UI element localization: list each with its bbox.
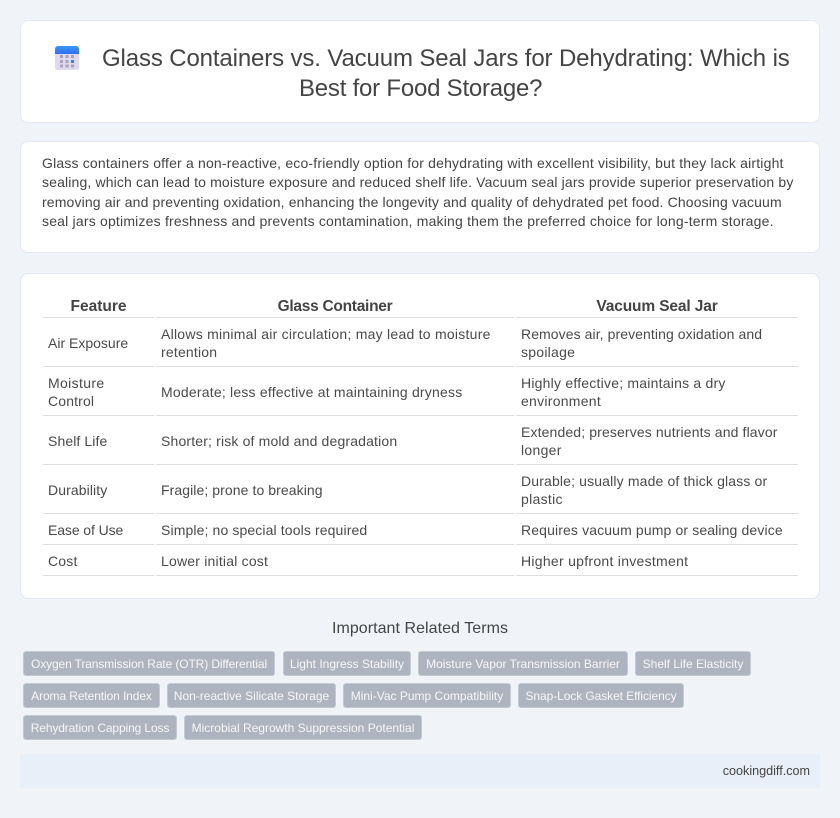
row: moisture control [48,375,726,409]
row: air exposure: spoilage [521,344,575,360]
title: Glass Containers vs. Vacuum Seal Jars for Dehydrating: Which is [102,45,790,72]
row: moisture control: Moderate; less effective at maintaining dryness [161,384,462,400]
row: cost: Lower initial cost [161,553,268,569]
row: air exposure: retention [161,344,217,360]
tag list: Mini-Vac Pump Compatibility [351,689,503,703]
row: cost [48,553,688,569]
row: durability: Durable; usually made of thick glass or [521,473,767,489]
tag list: Oxygen Transmission Rate (OTR) Differential [31,657,267,671]
table header: Vacuum Seal Jar [596,298,718,315]
heading: important related terms: Important Related Terms [332,620,508,637]
tag list: Light Ingress Stability [290,657,404,671]
title: Best for Food Storage? [299,75,542,102]
row: air exposure: Removes air, preventing oxidation and [521,326,762,342]
tag list: Microbial Regrowth Suppression Potential [192,721,414,735]
tag list: Rehydration Capping Loss [31,721,169,735]
row: ease of use [48,522,783,538]
row: shelf life [48,424,778,458]
panel: comparison table [20,273,820,599]
row: moisture control: Moisture [48,375,104,391]
tag list [23,651,751,740]
row: moisture control: Highly effective; maintains a dry [521,375,726,391]
icon: calendar [55,46,79,70]
row: shelf life: Extended; preserves nutrients and flavor [521,424,778,440]
row: moisture control: environment [521,393,601,409]
row: moisture control: Control [48,393,94,409]
table header: Feature [70,298,126,315]
row: air exposure: Air Exposure [48,335,128,351]
title [102,45,790,102]
tag list: Non-reactive Silicate Storage [174,689,329,703]
footer bar [20,754,820,788]
text block: intro: seal jars optimizes freshness and prevents contamination, making them the preferred choice for long-term storage. [42,213,774,229]
text block: intro: sealing, which can lead to moisture exposure and reduced shelf life. Vacuum seal jars provide superior preservation by [42,174,793,190]
row: ease of use: Simple; no special tools required [161,522,367,538]
tag list: Moisture Vapor Transmission Barrier [426,657,620,671]
panel: title card [20,20,820,123]
row: shelf life: Shorter; risk of mold and degradation [161,433,397,449]
row: durability: Durability [48,482,107,498]
row: cost: Higher upfront investment [521,553,688,569]
row: ease of use: Ease of Use [48,522,123,538]
row: durability [48,473,767,507]
row: ease of use: Requires vacuum pump or sealing device [521,522,783,538]
panel: intro paragraph [20,141,820,253]
text block: intro: Glass containers offer a non-reactive, eco-friendly option for dehydrating with excellent visibility, but they lack airtight [42,155,784,171]
text block: intro: removing air and preventing oxidation, enhancing the longevity and quality of dehydrated pet food. Choosing vacuum [42,194,782,210]
row: durability: plastic [521,491,563,507]
row: air exposure [48,326,762,360]
row: cost: Cost [48,553,78,569]
tag list: Snap-Lock Gasket Efficiency [525,689,677,703]
row: air exposure: Allows minimal air circulation; may lead to moisture [161,326,491,342]
text block: intro [42,155,794,229]
row: durability: Fragile; prone to breaking [161,482,323,498]
tag list: Shelf Life Elasticity [643,657,743,671]
row: shelf life: longer [521,442,562,458]
tag list: Aroma Retention Index [31,689,152,703]
footer source link: cookingdiff.com [723,764,810,778]
table header: Glass Container [278,298,392,315]
row: shelf life: Shelf Life [48,433,107,449]
table header [70,298,718,315]
